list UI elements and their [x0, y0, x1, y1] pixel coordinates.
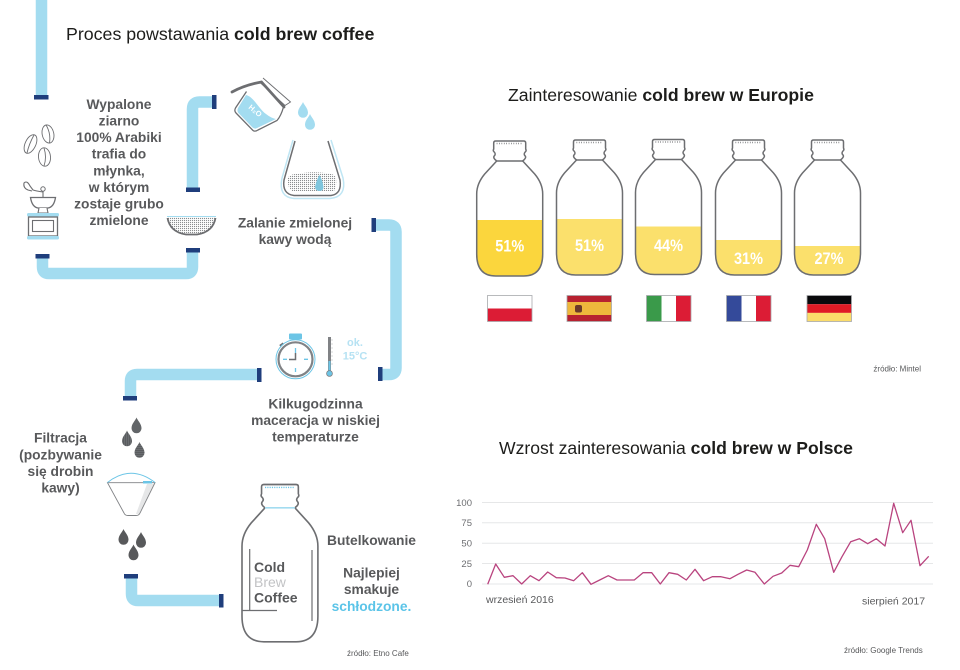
x axis labels: wrzesień 2016 [485, 594, 554, 606]
title: Europe: Zainteresowanie cold brew w Europie [508, 85, 814, 105]
source: Mintel: źródło: Mintel [873, 364, 921, 374]
title: process: Proces powstawania cold brew coffee [66, 24, 374, 44]
icon: stopwatch [276, 334, 315, 379]
flag: Germany [807, 296, 852, 322]
icon: coffee drops [118, 529, 146, 560]
pipe: top inlet [34, 0, 48, 100]
icon: kettle pouring water: H₂O [247, 103, 264, 119]
pipe: flask to maceration [372, 218, 396, 381]
text: step 1: 100% Arabiki [76, 130, 162, 145]
icon: coffee beans [21, 124, 56, 167]
icon: sieve [167, 216, 216, 234]
bottle label: Cold [254, 559, 285, 575]
text: step 1: zostaje grubo [74, 196, 164, 212]
text: step 5: Najlepiej [343, 566, 400, 580]
y axis labels: 0 [467, 579, 472, 590]
pipe: grinder to sieve [36, 248, 200, 274]
icon: water drops [298, 102, 315, 130]
text: step 3: temperaturze [272, 430, 359, 444]
flag: France [726, 296, 771, 322]
source: Etno Cafe: źródło: Etno Cafe [347, 649, 409, 658]
y axis labels: 25 [461, 559, 472, 570]
bottle: Poland 51% [477, 141, 543, 276]
pipe: filter to bottle [124, 574, 224, 608]
y axis labels: 50 [461, 538, 472, 550]
pipe: maceration to filter [123, 368, 262, 400]
text: step 1: Wypalone [87, 97, 152, 112]
bottle: Italy 44% [636, 140, 702, 274]
bottle: Germany 27%: 27% [814, 250, 844, 268]
text: step 4: się drobin [28, 464, 93, 479]
text: step 5: Butelkowanie [327, 533, 416, 548]
flag: Poland [488, 296, 532, 322]
text: temperature: 15°C [343, 350, 367, 362]
pipe: sieve to kettle [186, 95, 216, 192]
data line [488, 503, 929, 584]
bottle: Germany 27% [794, 140, 860, 275]
bottle: France 31%: 31% [734, 250, 763, 268]
icon: flask with coffee grounds [281, 140, 344, 198]
title: Poland: Wzrost zainteresowania cold brew w Polsce [499, 438, 853, 458]
bottle: Spain 51% [556, 140, 622, 275]
text: step 1: młynka, [93, 164, 145, 178]
bottle: Italy 44%: 44% [654, 237, 683, 255]
bottle: France 31% [716, 140, 782, 275]
text: step 1: ziarno [99, 114, 139, 128]
text: step 1: zmielone [89, 213, 149, 228]
y axis labels: 100 [456, 498, 472, 509]
bottle label: Coffee [254, 590, 298, 606]
bottle: Poland 51%: 51% [495, 238, 524, 256]
text: step 4: kawy) [41, 480, 80, 496]
text: step 4: (pozbywanie [19, 448, 102, 462]
flag: Spain [567, 296, 612, 322]
bottle label: Brew [254, 574, 287, 590]
text: step 2: Zalanie zmielonej [238, 216, 352, 230]
text: step 1: trafia do [92, 146, 146, 162]
line chart: Google Trends [456, 498, 933, 608]
source: Google Trends: źródło: Google Trends [844, 646, 923, 655]
icon: paper filter [108, 473, 155, 516]
text: step 5: smakuje [344, 582, 399, 597]
icon: coffee grinder [24, 182, 59, 240]
y axis labels: 75 [461, 518, 472, 529]
icon: kettle pouring water [232, 78, 290, 131]
text: step 3: maceracja w niskiej [251, 413, 380, 428]
flag: Italy [646, 296, 691, 322]
bottle: Spain 51%: 51% [575, 237, 604, 255]
icon: drops with grounds [122, 418, 144, 458]
icon: cold brew bottle [242, 484, 318, 642]
text: temperature: ok. [347, 337, 363, 349]
text: step 3: Kilkugodzinna [268, 396, 363, 412]
x axis labels: sierpień 2017 [862, 596, 925, 608]
text: step 2: kawy wodą [259, 232, 332, 247]
text: step 5: schłodzone. [332, 599, 411, 614]
icon: thermometer [327, 337, 333, 376]
text: step 1: w którym [88, 180, 149, 195]
text: step 4: Filtracja [34, 430, 87, 446]
